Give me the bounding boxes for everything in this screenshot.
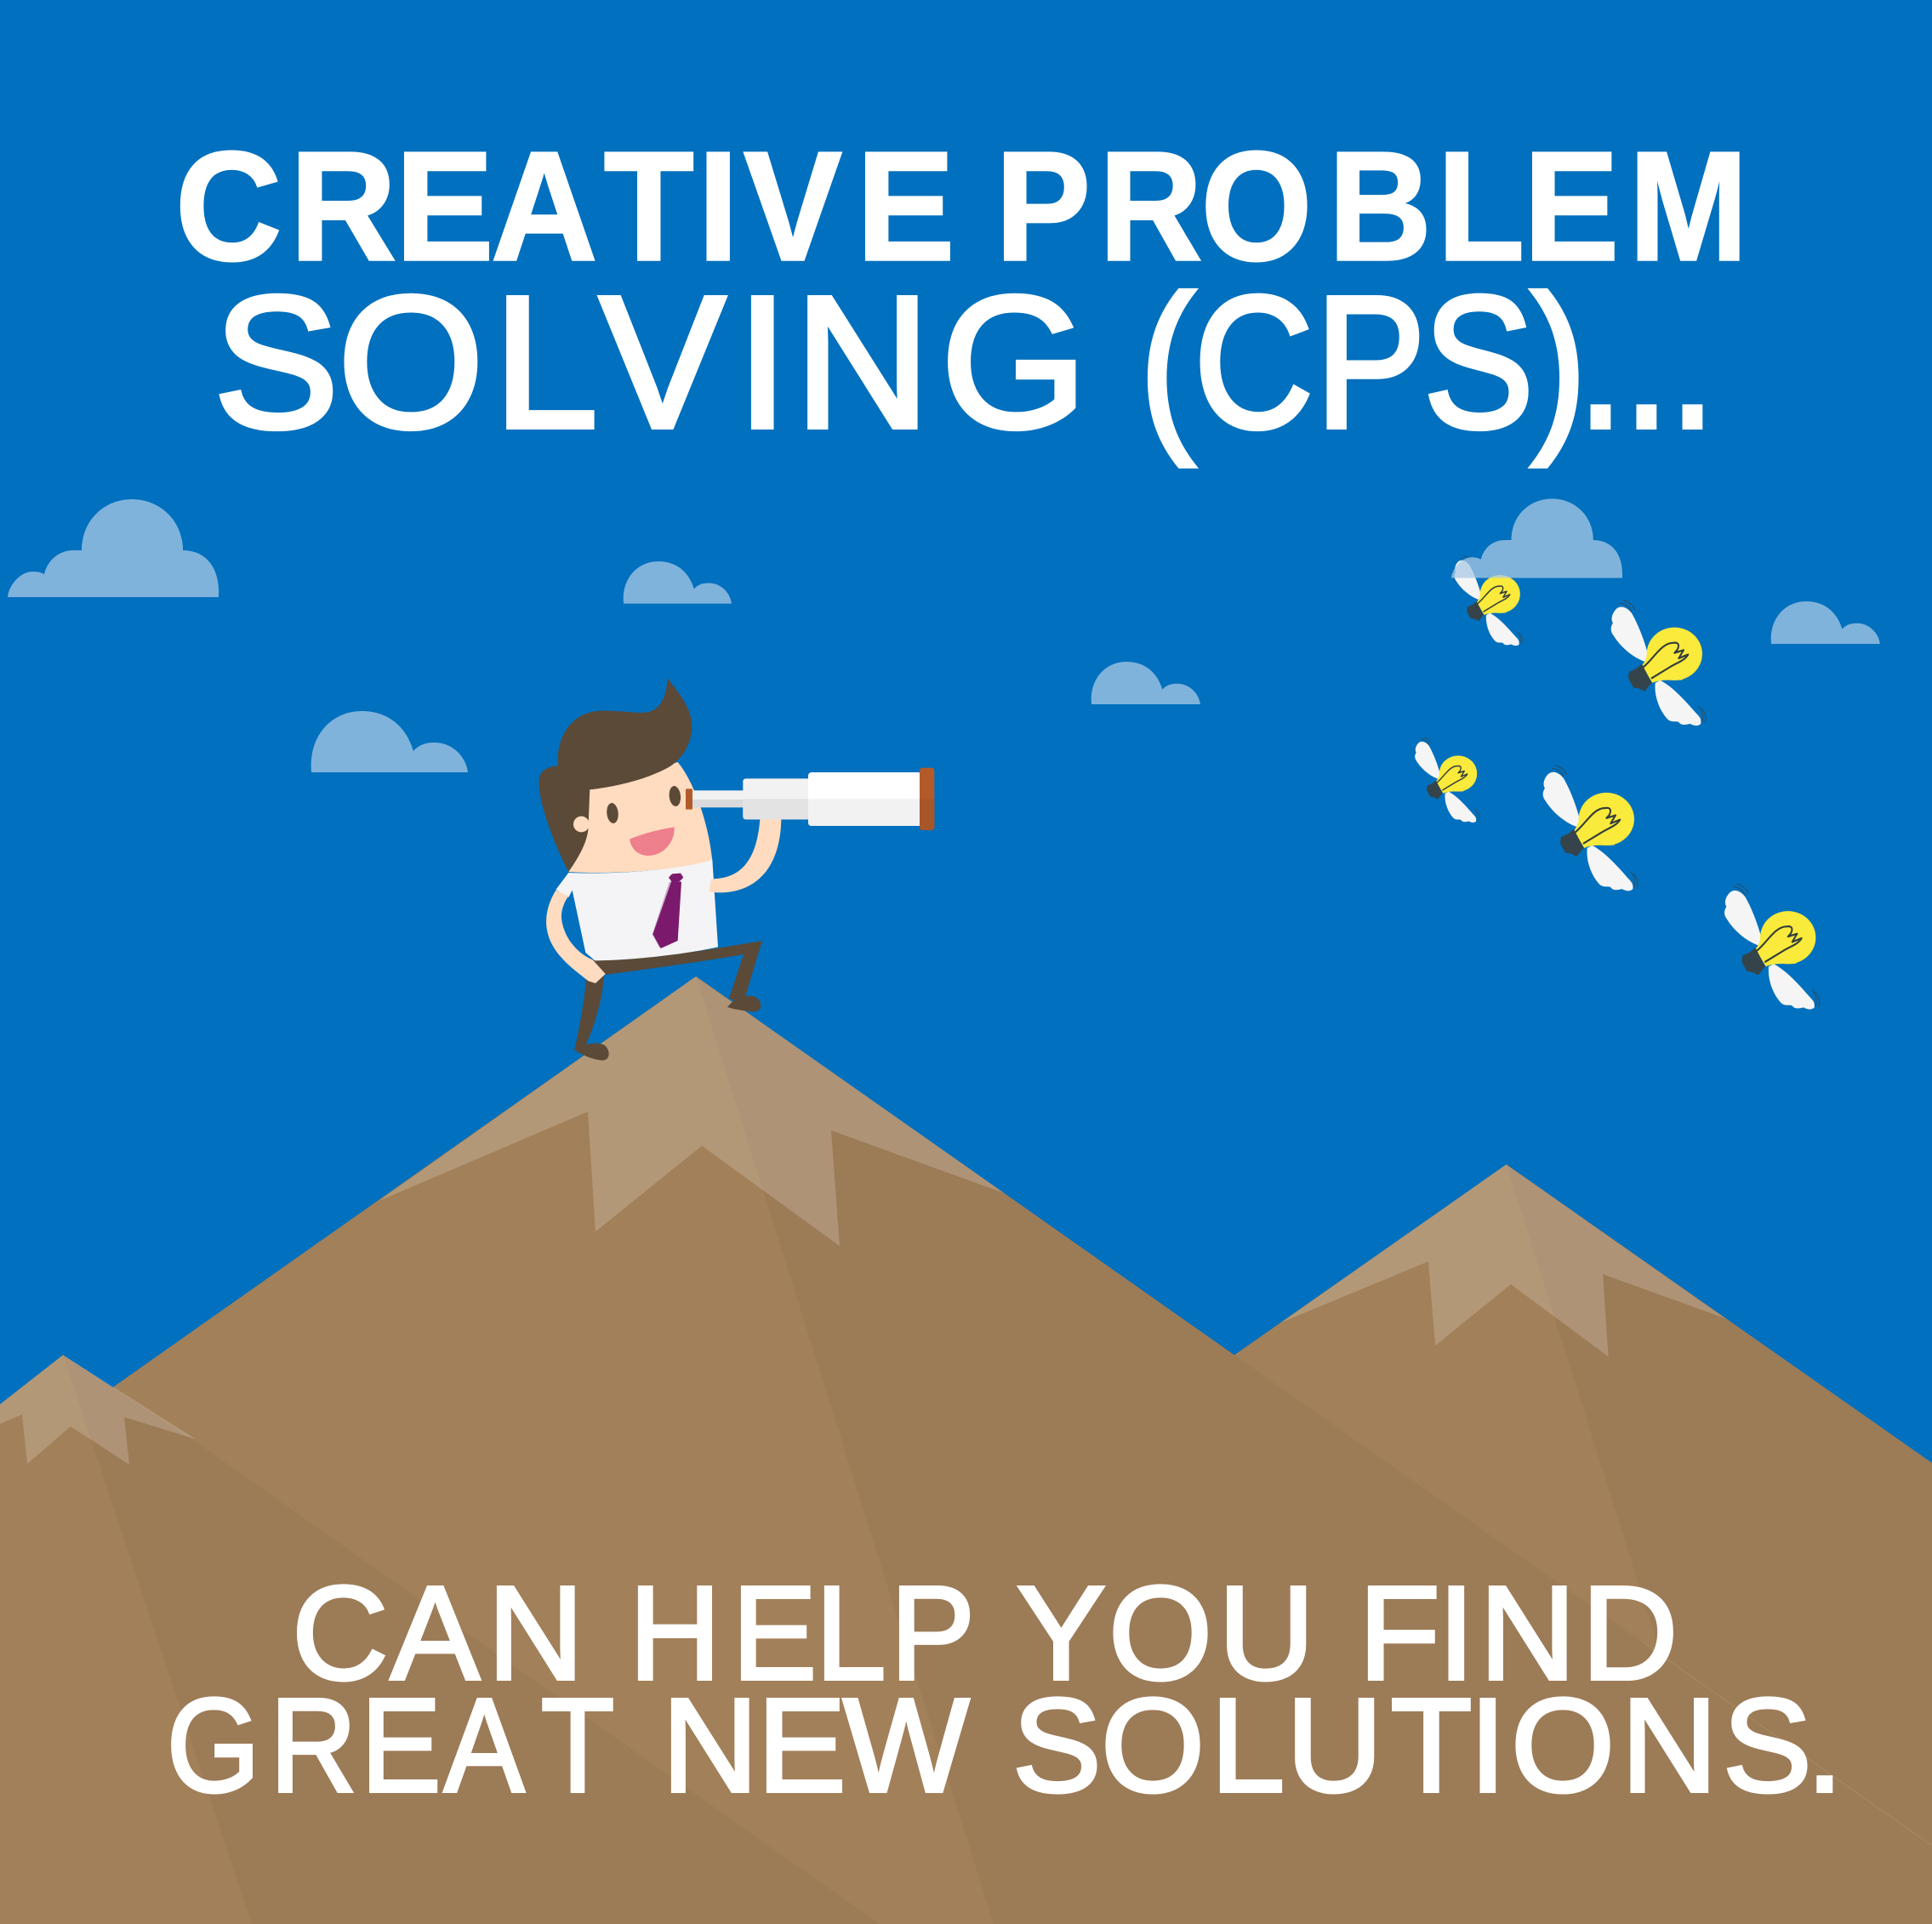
title line 2: (CPS)...: [1140, 258, 1715, 468]
closing text line 1: CAN: [292, 1559, 584, 1708]
mountain: right: [1021, 1164, 1932, 1924]
mouth: [630, 827, 675, 856]
shirt: [556, 860, 718, 960]
closing text line 1: YOU: [1017, 1559, 1314, 1708]
mountain: main: [0, 976, 1932, 1924]
left leg: [574, 972, 604, 1050]
businessman with telescope: [539, 678, 934, 1061]
right arm: [709, 819, 781, 892]
left arm: [546, 891, 606, 983]
closing text line 1: [292, 1559, 1678, 1708]
cloud: small centre left: [624, 561, 732, 604]
title line 2: [214, 257, 1715, 468]
ear: [573, 817, 590, 832]
cloud: centre right: [1091, 662, 1200, 704]
title line 2: SOLVING: [214, 257, 1087, 467]
title line 1: CREATIVE: [175, 118, 955, 293]
flying light bulb 1: [1455, 555, 1523, 646]
flying light bulb 2: [1611, 601, 1706, 726]
cloud: above light bulbs: [1451, 498, 1622, 578]
hair: [558, 678, 692, 789]
tie: [653, 874, 683, 948]
eyes: [606, 785, 681, 824]
cloud: lower left: [311, 711, 468, 772]
closing text line 2: SOLUTIONS.: [1012, 1671, 1844, 1820]
flying light bulb 5: [1724, 884, 1820, 1010]
left shoe: [574, 1044, 609, 1061]
face: [568, 762, 712, 873]
cloud: large left: [8, 499, 219, 597]
snow cap: small mountain: [0, 1355, 196, 1465]
back hair: [539, 766, 596, 872]
title line 1: [175, 118, 1748, 293]
mountain: small left: [0, 1355, 880, 1924]
trousers: [593, 941, 762, 999]
cloud: far right: [1771, 601, 1880, 644]
title line 1: PROBLEM: [995, 120, 1748, 293]
closing text line 2: NEW: [662, 1671, 969, 1820]
closing text line 1: HELP: [630, 1559, 975, 1708]
snow cap: right mountain: [1281, 1164, 1725, 1357]
closing text line 1: FIND: [1359, 1559, 1678, 1708]
flying light bulb 4: [1543, 766, 1638, 891]
flying light bulb 3: [1415, 737, 1479, 823]
snow cap: main mountain: [379, 976, 1005, 1246]
right shoe: [727, 996, 761, 1011]
closing text line 2: [167, 1671, 1844, 1820]
telescope: [686, 768, 934, 830]
closing text line 2: GREAT: [167, 1671, 614, 1820]
